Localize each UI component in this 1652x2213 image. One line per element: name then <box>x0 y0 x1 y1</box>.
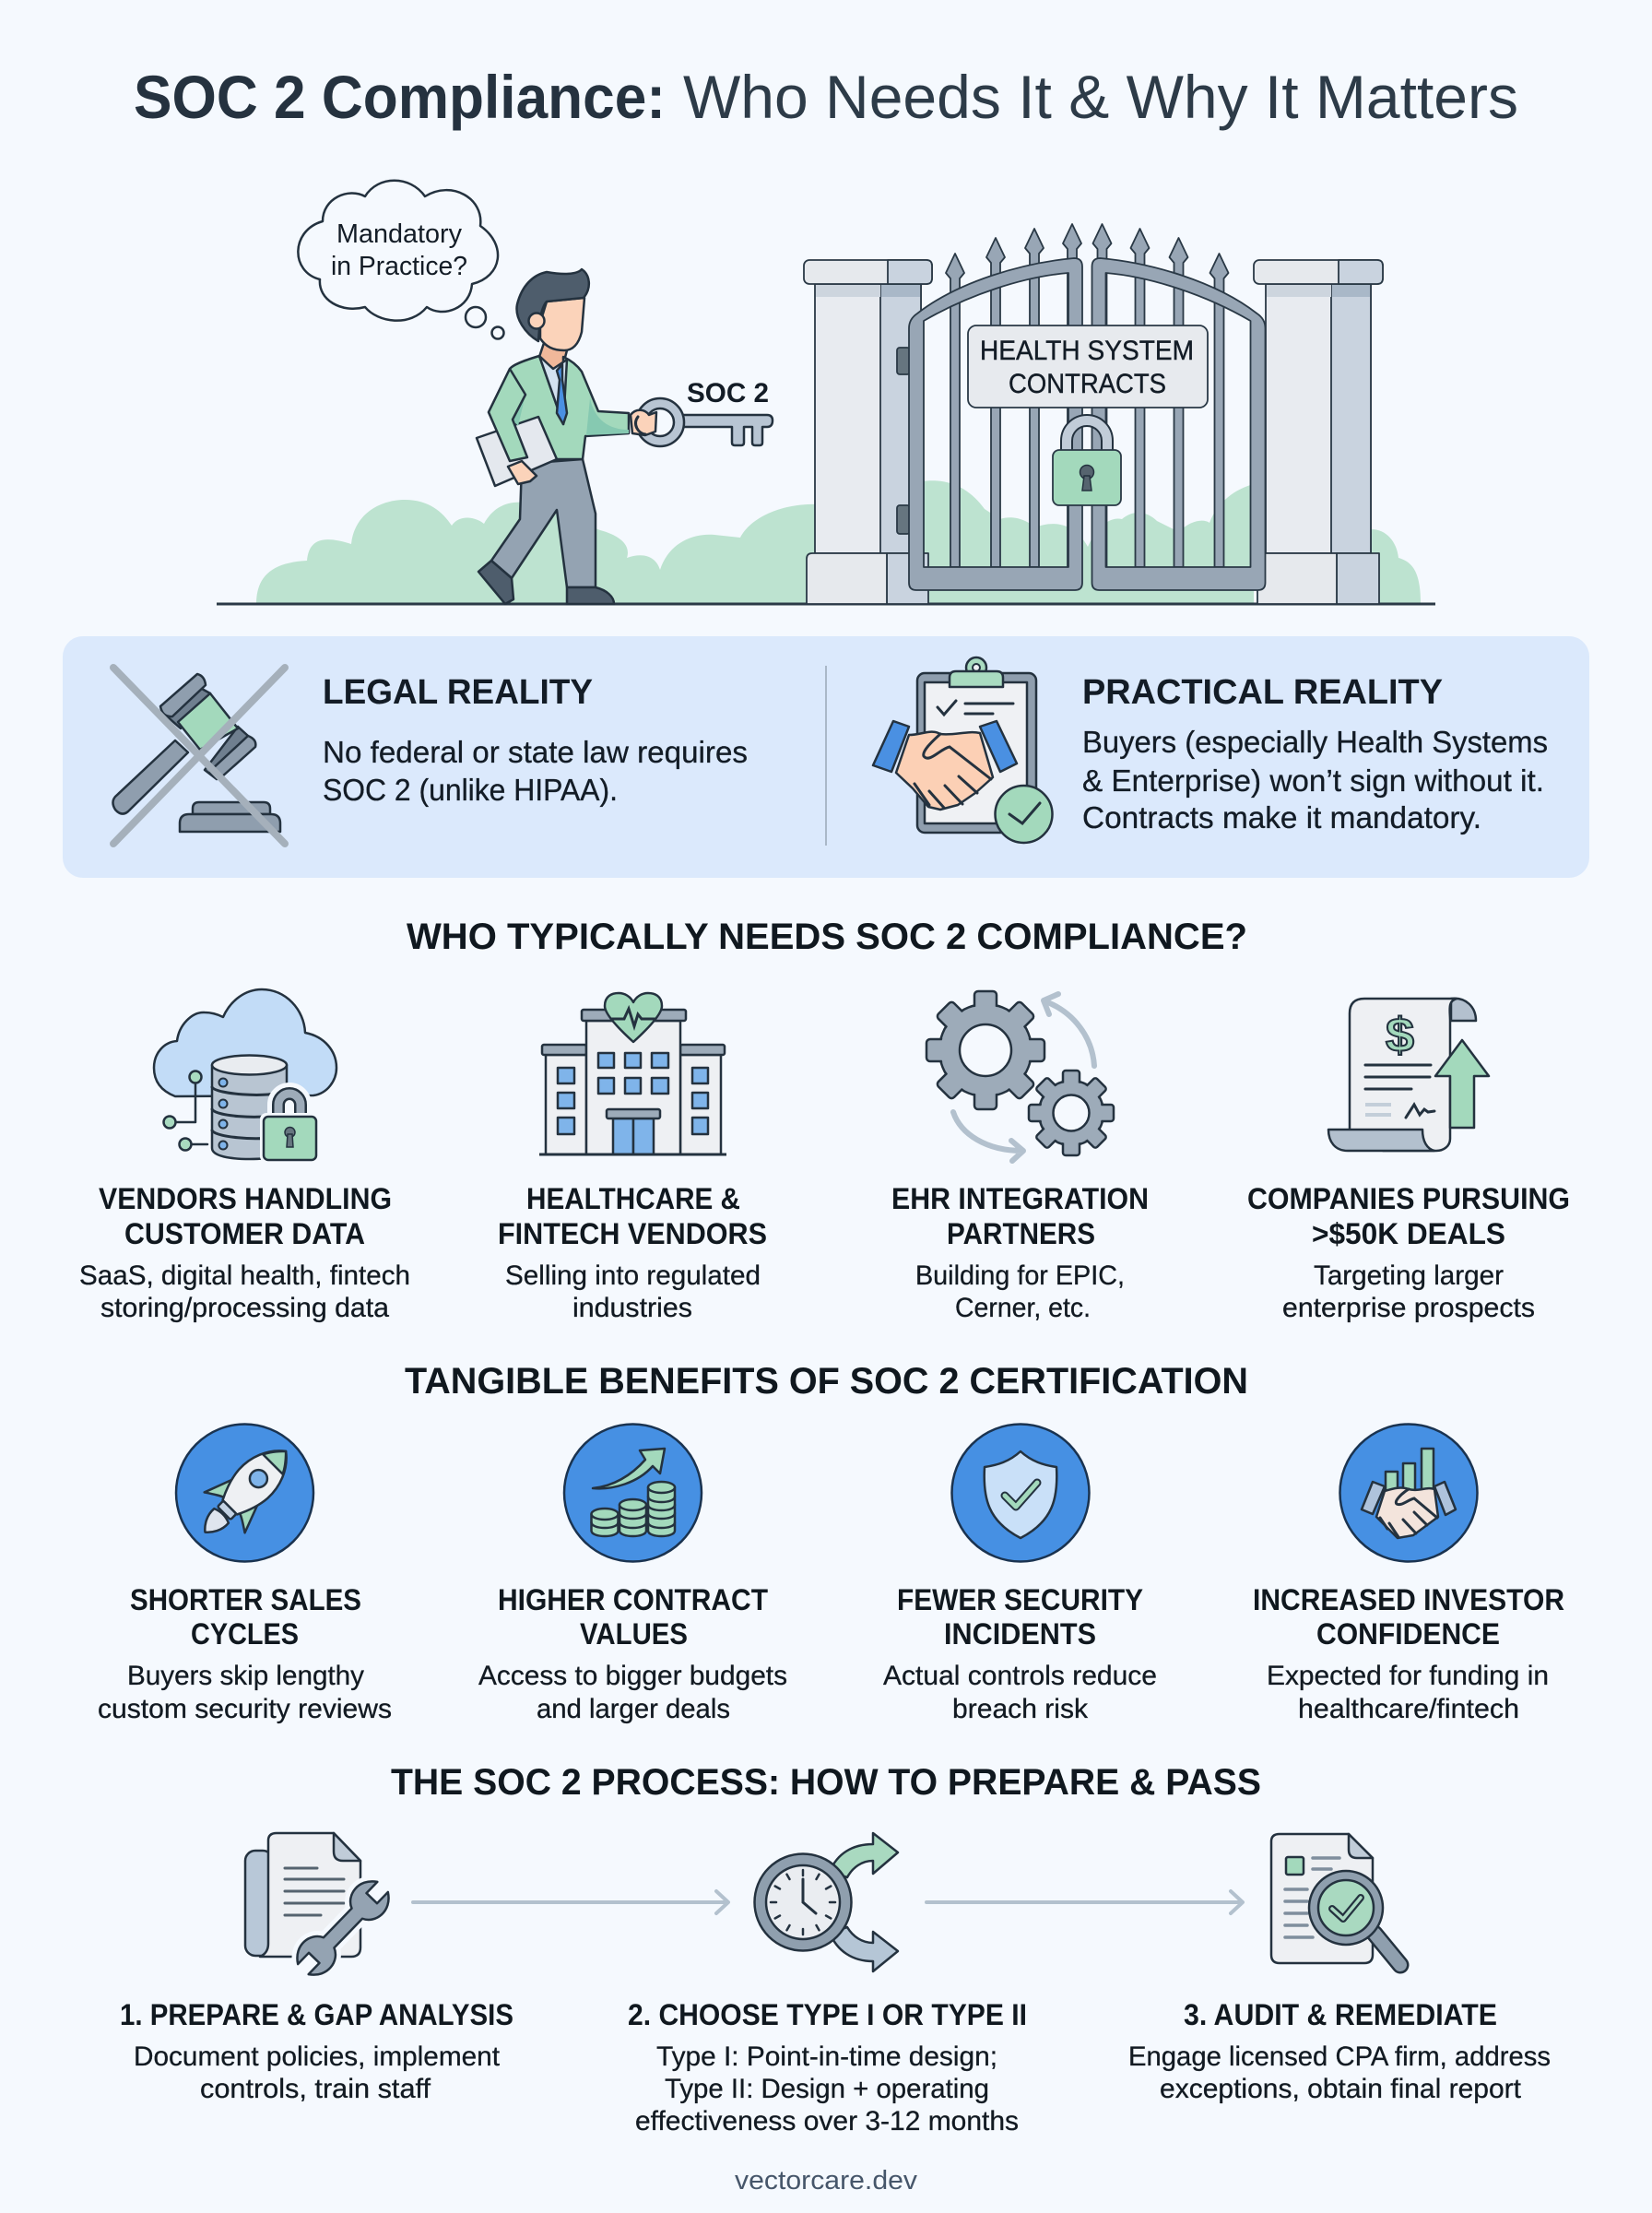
gate <box>909 224 1265 590</box>
text: legal reality: SOC 2 (unlike HIPAA). <box>323 773 618 807</box>
icon: clock with branching arrows <box>754 1833 898 1971</box>
card: companies pursuing big deals: enterprise prospects <box>1282 1293 1535 1323</box>
card: EHR integration partners: PARTNERS <box>947 1217 1095 1250</box>
card: vendors handling customer data: storing/processing data <box>100 1293 389 1323</box>
card: healthcare and fintech vendors: HEALTHCARE & <box>526 1182 740 1215</box>
card: fewer security incidents: breach risk <box>952 1694 1089 1724</box>
step 1: prepare and gap analysis: controls, train staff <box>200 2074 431 2104</box>
text: practical reality <box>1082 673 1548 834</box>
sign: health system contracts: CONTRACTS <box>1009 369 1166 399</box>
step 1: prepare and gap analysis: 1. PREPARE & GAP ANALYSIS <box>120 1998 513 2031</box>
card: fewer security incidents: INCIDENTS <box>944 1617 1096 1651</box>
step 2: choose type <box>628 1833 1027 2136</box>
card: shorter sales cycles: SHORTER SALES <box>130 1583 361 1616</box>
card: EHR integration partners: EHR INTEGRATION <box>891 1182 1149 1215</box>
group: process steps <box>120 1833 1551 2136</box>
card: fewer security incidents: Actual controls reduce <box>883 1661 1157 1691</box>
card: vendors handling customer data <box>79 989 410 1323</box>
step 3: audit and remediate <box>1128 1834 1551 2104</box>
icon: handshake with bars <box>1340 1424 1477 1562</box>
text: legal reality: No federal or state law requires <box>323 735 748 769</box>
group: benefit cards <box>98 1424 1564 1724</box>
card: shorter sales cycles <box>98 1424 392 1724</box>
icon: coins and growth arrow <box>564 1424 702 1562</box>
step 3: audit and remediate: 3. AUDIT & REMEDIATE <box>1184 1998 1497 2031</box>
step 2: choose type: Type I: Point-in-time design; <box>656 2041 997 2072</box>
text: practical reality: Contracts make it mandatory. <box>1082 800 1481 834</box>
step 2: choose type: Type II: Design + operating <box>665 2074 989 2104</box>
card: fewer security incidents: FEWER SECURITY <box>897 1583 1143 1616</box>
text: legal reality: LEGAL REALITY <box>323 673 593 712</box>
key <box>631 378 773 446</box>
card: shorter sales cycles: custom security reviews <box>98 1694 392 1724</box>
icon: hospital with heart <box>539 993 726 1154</box>
footer url: vectorcare.dev <box>735 2166 918 2195</box>
card: increased investor confidence <box>1253 1424 1564 1724</box>
card: EHR integration partners <box>891 991 1149 1323</box>
card: increased investor confidence: CONFIDENCE <box>1316 1617 1500 1651</box>
person walking with key <box>477 269 773 604</box>
text: practical reality: Buyers (especially Health Systems <box>1082 725 1548 759</box>
card: vendors handling customer data: CUSTOMER DATA <box>124 1217 365 1250</box>
title: SOC 2 Compliance: <box>134 63 666 131</box>
card: healthcare and fintech vendors: Selling into regulated <box>505 1260 761 1291</box>
card: companies pursuing big deals: >$50K DEALS <box>1312 1217 1505 1250</box>
card: shorter sales cycles: CYCLES <box>191 1617 299 1651</box>
step 2: choose type: effectiveness over 3-12 months <box>635 2106 1019 2136</box>
group: who needs cards <box>79 989 1570 1323</box>
bushes behind the scene <box>256 480 1421 604</box>
key: SOC 2 <box>687 378 769 408</box>
icon: gears with arrows <box>926 991 1114 1161</box>
thought bubble: Mandatory <box>336 219 462 249</box>
step 3: audit and remediate: exceptions, obtain final report <box>1160 2074 1522 2104</box>
text: practical reality: PRACTICAL REALITY <box>1082 673 1443 712</box>
text: legal reality <box>323 673 748 807</box>
hero illustration <box>217 181 1435 604</box>
title: Who Needs It & Why It Matters <box>683 63 1518 131</box>
card: companies pursuing big deals <box>1247 999 1570 1323</box>
card: healthcare and fintech vendors <box>498 993 767 1323</box>
card: increased investor confidence: INCREASED INVESTOR <box>1253 1583 1564 1616</box>
arrow: step 1 to step 2 <box>413 1891 728 1913</box>
text: practical reality: & Enterprise) won’t sign without it. <box>1082 763 1544 798</box>
heading: tangible benefits: TANGIBLE BENEFITS OF SOC 2 CERTIFICATION <box>405 1361 1248 1402</box>
arrow: step 2 to step 3 <box>926 1891 1243 1913</box>
icon: contract with up arrow <box>1328 999 1489 1151</box>
card: healthcare and fintech vendors: FINTECH VENDORS <box>498 1217 767 1250</box>
icon: document with magnifier <box>1271 1834 1400 1965</box>
card: EHR integration partners: Building for EPIC, <box>915 1260 1125 1291</box>
title <box>134 63 1518 131</box>
card: EHR integration partners: Cerner, etc. <box>955 1293 1091 1323</box>
step 2: choose type: 2. CHOOSE TYPE I OR TYPE II <box>628 1998 1027 2031</box>
step 1: prepare and gap analysis <box>120 1833 513 2104</box>
heading: the SOC 2 process: THE SOC 2 PROCESS: HOW TO PREPARE & PASS <box>391 1762 1261 1803</box>
card: increased investor confidence: Expected for funding in <box>1267 1661 1549 1691</box>
sign: health system contracts: HEALTH SYSTEM <box>980 336 1194 366</box>
card: vendors handling customer data: VENDORS HANDLING <box>99 1182 392 1215</box>
thought bubble: in Practice? <box>331 252 467 281</box>
card: higher contract values: and larger deals <box>537 1694 730 1724</box>
icon: handshake over clipboard <box>873 657 1053 843</box>
heading: who needs SOC 2: WHO TYPICALLY NEEDS SOC 2 COMPLIANCE? <box>407 917 1247 957</box>
card: higher contract values <box>478 1424 787 1724</box>
icon: shield with check <box>951 1424 1090 1562</box>
step 1: prepare and gap analysis: Document policies, implement <box>134 2041 501 2072</box>
card: fewer security incidents <box>883 1424 1157 1724</box>
step 3: audit and remediate: Engage licensed CPA firm, address <box>1128 2041 1551 2072</box>
icon: contract with up arrow: $ <box>1386 1009 1414 1062</box>
card: increased investor confidence: healthcare/fintech <box>1298 1694 1519 1724</box>
card: higher contract values: VALUES <box>580 1617 688 1651</box>
icon: cloud database lock <box>154 989 336 1163</box>
card: higher contract values: Access to bigger budgets <box>478 1661 787 1691</box>
panel: legal and practical reality <box>63 636 1589 878</box>
sign: health system contracts <box>968 325 1208 408</box>
card: higher contract values: HIGHER CONTRACT <box>498 1583 768 1616</box>
card: shorter sales cycles: Buyers skip lengthy <box>127 1661 364 1691</box>
card: companies pursuing big deals: Targeting larger <box>1314 1260 1504 1291</box>
thought bubble <box>298 181 503 339</box>
card: healthcare and fintech vendors: industries <box>572 1293 692 1323</box>
left gate pillar <box>804 260 932 604</box>
ground line <box>217 603 1435 605</box>
icon: document with wrench <box>245 1833 395 1982</box>
icon: rocket in blue circle <box>176 1424 313 1562</box>
card: companies pursuing big deals: COMPANIES PURSUING <box>1247 1182 1570 1215</box>
padlock <box>1053 420 1121 505</box>
icon: crossed-out gavel <box>112 668 285 844</box>
right gate pillar <box>1254 260 1383 604</box>
card: vendors handling customer data: SaaS, digital health, fintech <box>79 1260 410 1291</box>
